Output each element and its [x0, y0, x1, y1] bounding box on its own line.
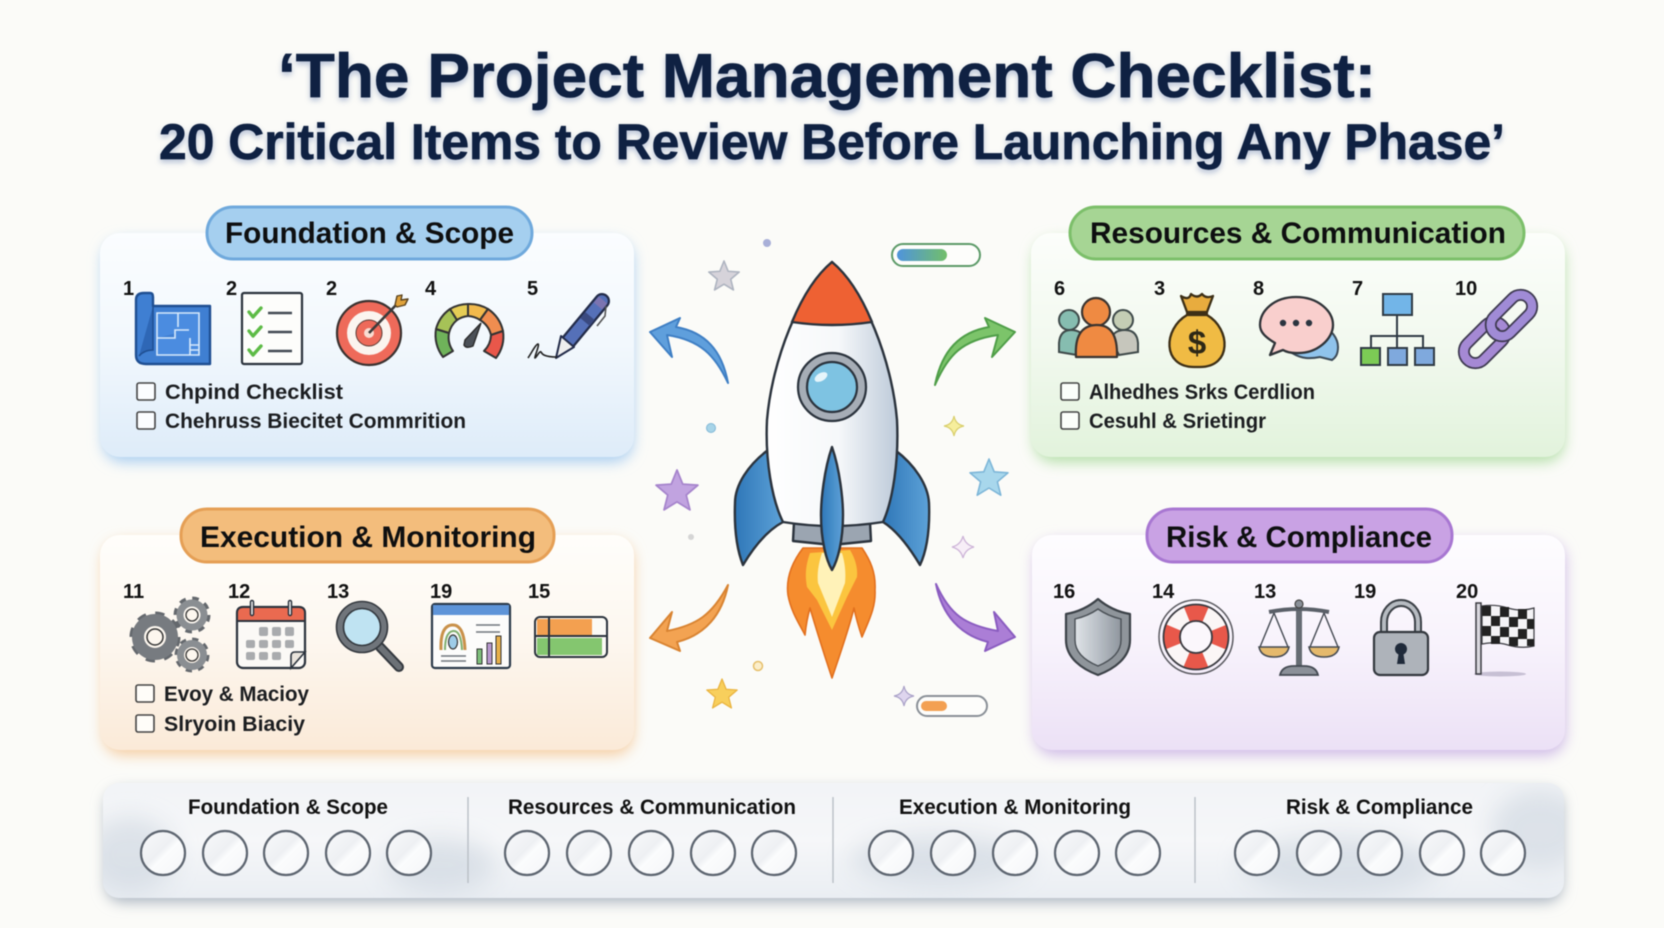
dot: indigo	[763, 239, 771, 247]
star: gold	[707, 679, 737, 708]
item 6: team icon: 6	[1054, 278, 1065, 300]
item 16: shield icon	[1053, 581, 1130, 675]
star: purple	[656, 470, 698, 510]
item 4: gauge icon: 4	[425, 278, 437, 300]
star: blue	[970, 459, 1008, 495]
tracker group: Foundation & Scope	[141, 796, 431, 875]
arrow: to Execution & Monitoring	[650, 585, 728, 651]
progress bar: top	[892, 244, 980, 266]
dot: gold ring	[754, 662, 762, 670]
arrow: to Risk & Compliance	[936, 584, 1015, 651]
arrow: to Foundation & Scope	[650, 318, 728, 383]
heading pill: Foundation & Scope: Foundation & Scope	[225, 217, 514, 250]
item 10: chain icon	[1455, 278, 1537, 368]
sparkle: yellow	[944, 416, 964, 436]
item 20: checkered flag icon: 20	[1456, 581, 1478, 603]
item 1: blueprint icon: 1	[123, 278, 134, 300]
heading pill: Execution & Monitoring	[181, 509, 554, 562]
rocket right fin	[883, 450, 929, 565]
item 15: gantt table icon	[528, 581, 607, 657]
tracker group: Execution & Monitoring: Execution & Monitoring	[899, 796, 1131, 819]
item 13: scales icon	[1254, 581, 1339, 675]
item 11: gears icon: 11	[123, 581, 144, 603]
rocket nose cone	[792, 262, 872, 325]
item 7: org chart icon	[1352, 278, 1434, 365]
item 3: target icon	[326, 278, 408, 365]
item 20: checkered flag icon	[1456, 581, 1534, 676]
item 3: money bag icon	[1154, 278, 1225, 367]
item 6: team icon	[1054, 278, 1138, 357]
item 19: padlock icon	[1354, 581, 1428, 675]
heading pill: Execution & Monitoring: Execution & Monitoring	[200, 521, 536, 554]
rocket nozzle	[793, 522, 871, 545]
rocket porthole	[798, 353, 866, 421]
arrow: to Resources & Communication	[935, 318, 1015, 385]
sparkle: pink	[952, 536, 974, 558]
tracker group: Execution & Monitoring	[869, 796, 1160, 875]
rocket body	[767, 262, 897, 526]
item 2: checklist icon	[226, 278, 302, 364]
item 8: speech bubbles icon: 8	[1253, 278, 1264, 300]
dot: grey	[688, 534, 694, 540]
heading pill: Resources & Communication	[1070, 207, 1524, 259]
item 19: padlock icon: 19	[1354, 581, 1376, 603]
tracker group: Risk & Compliance: Risk & Compliance	[1286, 796, 1473, 819]
item 4: gauge icon	[425, 278, 503, 358]
item 10: chain icon: 10	[1455, 278, 1477, 300]
tracker group: Foundation & Scope: Foundation & Scope	[188, 796, 388, 819]
tracker group: Risk & Compliance	[1235, 796, 1525, 875]
checklist item: Slryoin Biaciy: Slryoin Biaciy	[164, 713, 305, 736]
item 3: money bag icon: 3	[1154, 278, 1165, 300]
checklist item: Cesuhl & Srietingr: Cesuhl & Srietingr	[1089, 410, 1266, 433]
item 14: lifebuoy icon	[1152, 581, 1233, 674]
checklist item: Chpind Checklist: Chpind Checklist	[165, 381, 343, 404]
checklist item: Chehruss Biecitet Commrition: Chehruss Biecitet Commrition	[165, 410, 466, 433]
title: ‘The Project Management Checklist:	[278, 42, 1376, 111]
title: 20 Critical Items to Review Before Launching Any Phase’	[159, 114, 1505, 170]
panel: Foundation & Scope	[100, 207, 634, 462]
item 5: pen signature icon: 5	[527, 278, 538, 300]
item 16: shield icon: 16	[1053, 581, 1075, 603]
item 1: blueprint icon	[123, 278, 210, 364]
progress bar: bottom	[917, 696, 987, 716]
item 15: gantt table icon: 15	[528, 581, 550, 603]
checklist item: Alhedhes Srks Cerdlion: Alhedhes Srks Cerdlion	[1089, 381, 1315, 404]
heading pill: Foundation & Scope	[207, 207, 532, 259]
item 14: lifebuoy icon: 14	[1152, 581, 1175, 603]
tracker group: Resources & Communication: Resources & Communication	[508, 796, 796, 819]
panel: Execution & Monitoring	[100, 509, 634, 755]
heading pill: Resources & Communication: Resources & Communication	[1090, 217, 1506, 250]
item 8: speech bubbles icon	[1253, 278, 1338, 360]
checklist item: Evoy & Macioy: Evoy & Macioy	[164, 683, 309, 706]
panel: Resources & Communication	[1031, 207, 1565, 462]
item 12: calendar icon	[228, 581, 305, 668]
rocket centre fin	[821, 447, 843, 570]
item 13: magnifier icon: 13	[327, 581, 349, 603]
item 3: money bag icon: $	[1188, 324, 1206, 361]
rocket illustration	[735, 262, 929, 678]
item 14: dashboard icon	[430, 581, 510, 668]
item 3: target icon: 2	[326, 278, 337, 300]
item 13: scales icon: 13	[1254, 581, 1276, 603]
rocket flame	[788, 548, 875, 678]
progress tracker strip	[85, 783, 1590, 902]
title	[159, 42, 1505, 170]
sparkle: lilac	[894, 686, 914, 706]
rocket left fin	[735, 450, 783, 565]
item 13: magnifier icon	[327, 581, 399, 667]
item 7: org chart icon: 7	[1352, 278, 1363, 300]
heading pill: Risk & Compliance: Risk & Compliance	[1166, 521, 1432, 554]
item 2: checklist icon: 2	[226, 278, 237, 300]
star: grey	[709, 261, 739, 290]
item 5: pen signature icon	[527, 278, 606, 358]
item 11: gears icon	[123, 581, 207, 669]
item 14: dashboard icon: 19	[430, 581, 452, 603]
panel: Risk & Compliance	[1032, 509, 1565, 755]
heading pill: Risk & Compliance	[1147, 509, 1452, 562]
tracker group: Resources & Communication	[505, 796, 796, 875]
item 12: calendar icon: 12	[228, 581, 250, 603]
dot: blue	[706, 424, 716, 432]
